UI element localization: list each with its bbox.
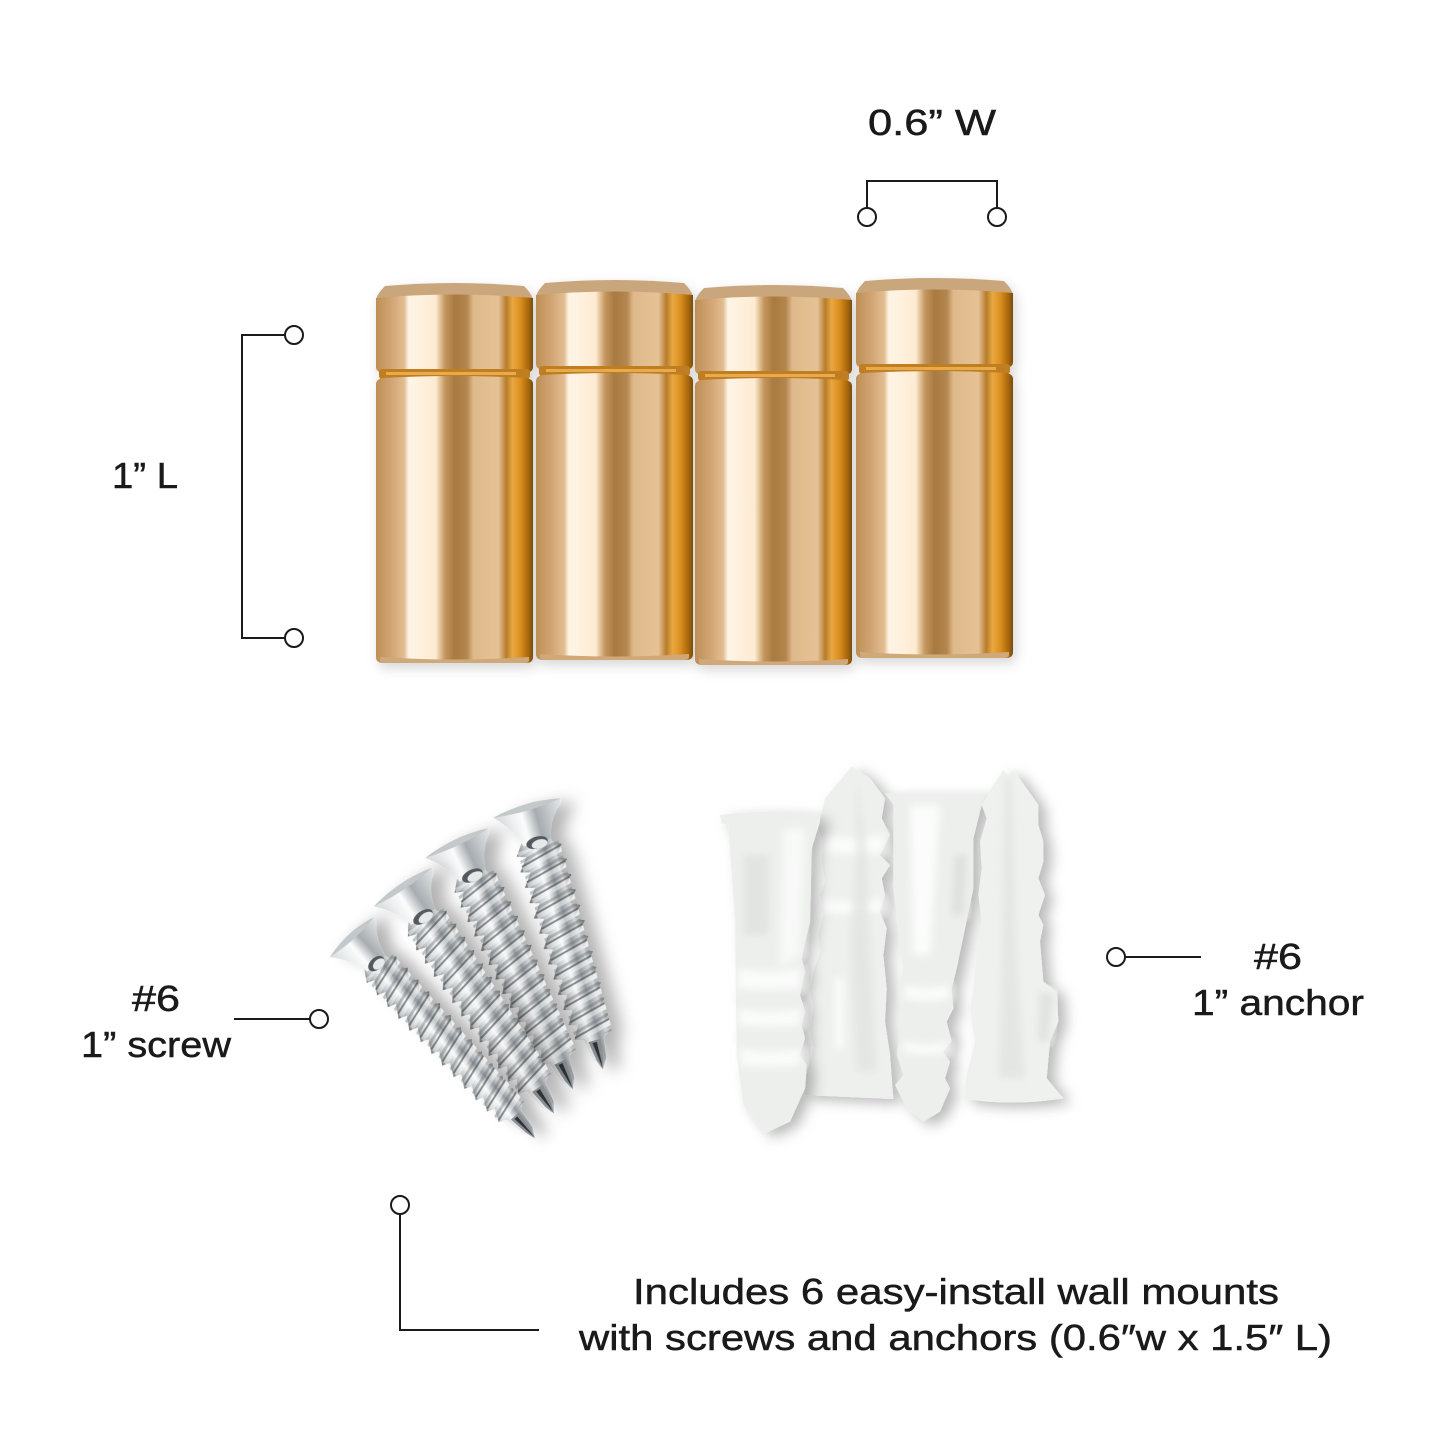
mount 4 [856, 278, 1013, 658]
wall anchors [720, 767, 1063, 1133]
width label: 0.6” W [868, 102, 996, 143]
anchor 2 [805, 767, 893, 1099]
screw callout [81, 978, 328, 1065]
anchor label: #6 [1254, 936, 1302, 977]
anchor 4 [963, 770, 1063, 1102]
anchor leader [1107, 948, 1201, 966]
screw 2 [372, 864, 583, 1133]
screw leader [234, 1010, 328, 1028]
length label: 1” L [112, 455, 178, 496]
includes text: with screws and anchors (0.6″w x 1.5″ L) [578, 1317, 1332, 1358]
length bracket [242, 326, 303, 647]
includes text: Includes 6 easy-install wall mounts [633, 1271, 1279, 1312]
mount 2 [536, 280, 693, 660]
screw 4 [492, 794, 636, 1079]
anchor label: 1” anchor [1192, 982, 1364, 1023]
width bracket [858, 181, 1006, 226]
screw 1 [327, 914, 557, 1158]
anchor 3 [885, 793, 987, 1122]
mount 3 [695, 285, 852, 665]
anchor callout [1107, 936, 1364, 1023]
mount 1 [376, 283, 533, 663]
anchor label [1192, 936, 1364, 1023]
screw label: 1” screw [81, 1024, 232, 1065]
screw 3 [424, 824, 604, 1104]
screw label: #6 [132, 978, 180, 1019]
length dimension [112, 326, 303, 647]
includes leader [391, 1196, 539, 1330]
width dimension [858, 102, 1006, 226]
screws [327, 794, 636, 1158]
screw label [81, 978, 232, 1065]
includes text [578, 1271, 1332, 1358]
includes callout [391, 1196, 1332, 1358]
gold standoff mounts [376, 278, 1013, 665]
anchor 1 [720, 812, 820, 1133]
